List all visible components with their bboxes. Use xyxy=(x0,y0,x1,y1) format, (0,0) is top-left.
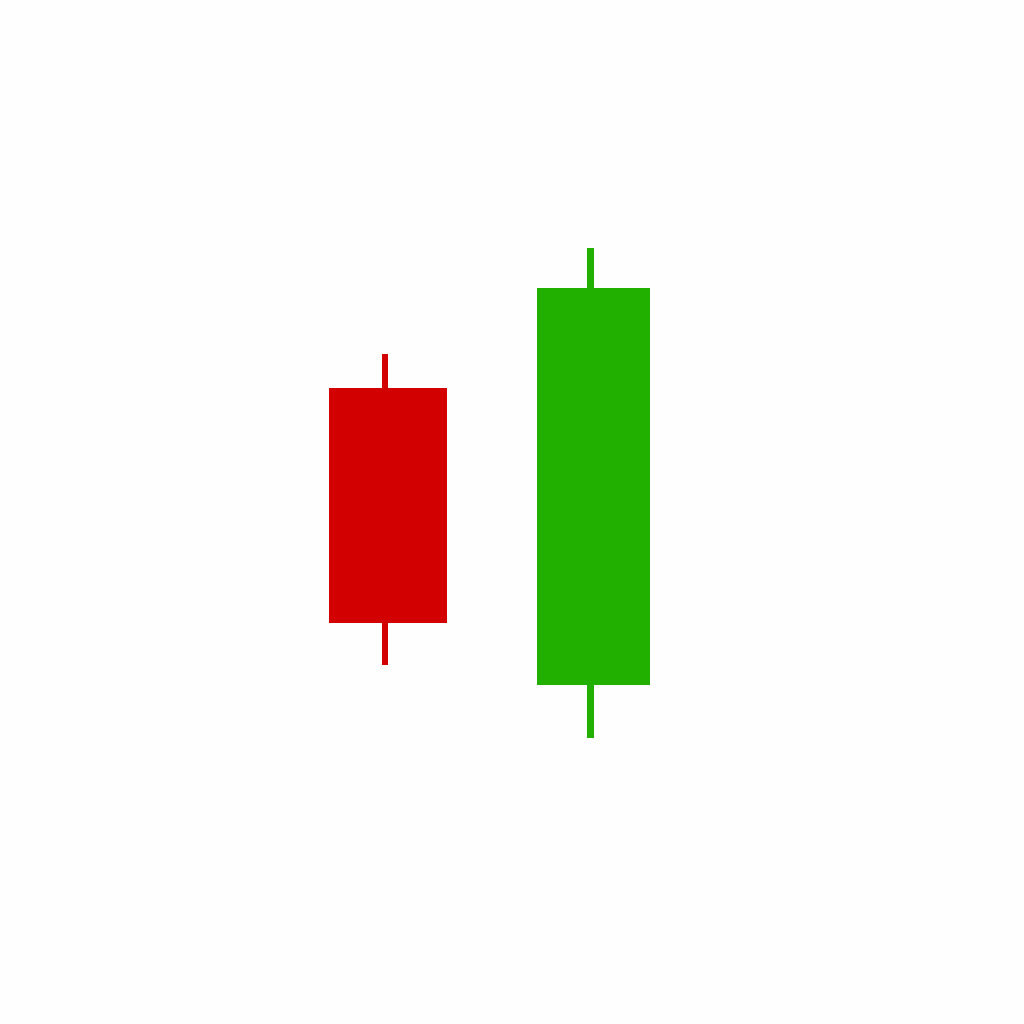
candle: green bullish xyxy=(537,248,650,738)
candle: red bearish xyxy=(329,354,447,665)
